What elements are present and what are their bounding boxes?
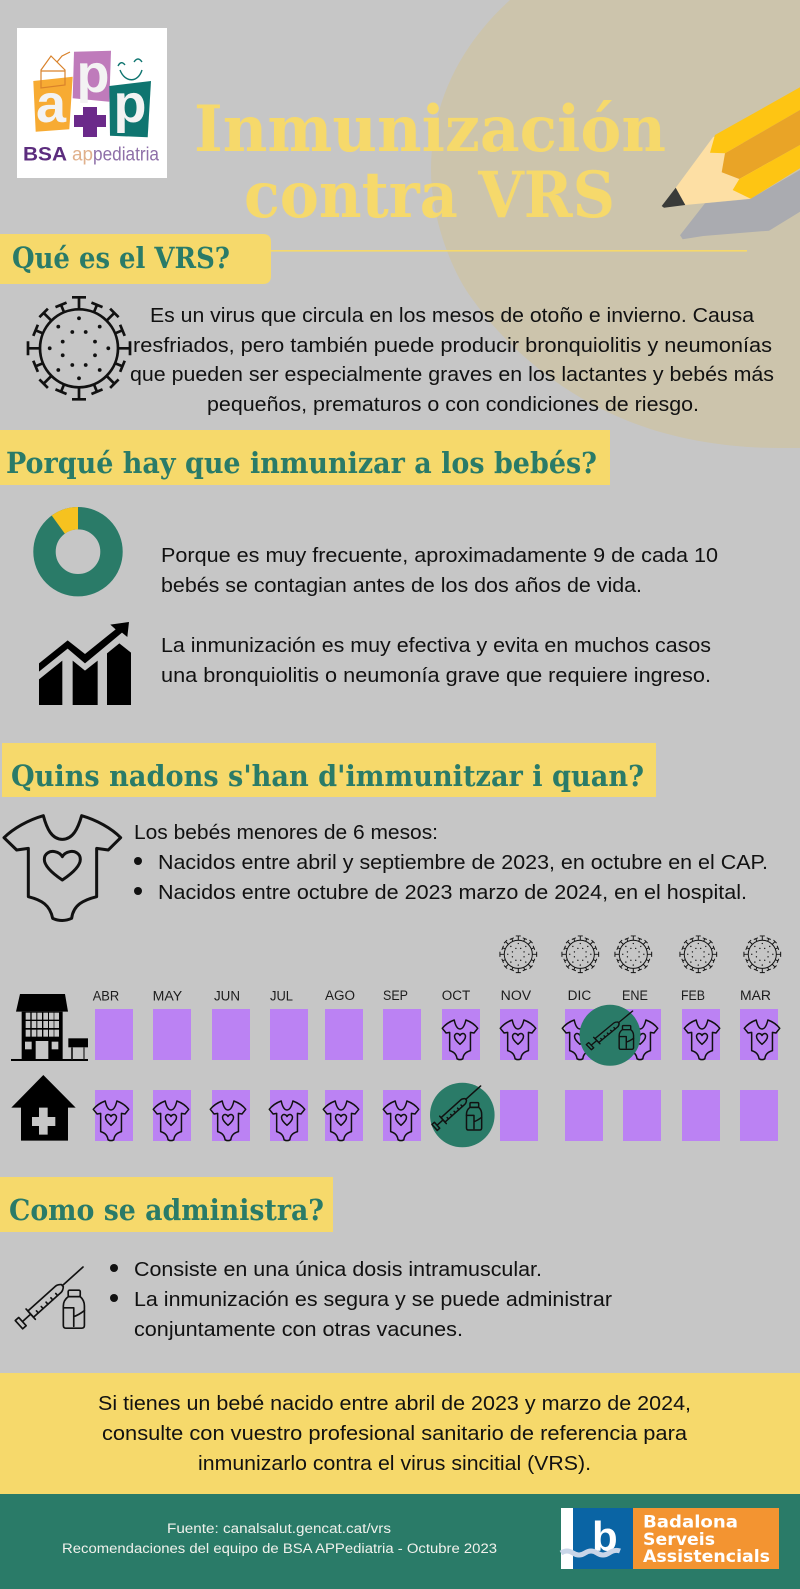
text: definition of VRS: resfriados, pero también puede producir bronquiolitis y neumonías xyxy=(133,335,772,357)
panel: call to action: consulte con vuestro profesional sanitario de referencia para xyxy=(102,1423,688,1445)
text: definition of VRS xyxy=(130,305,774,416)
icon: syringe and vial xyxy=(14,1262,88,1330)
heading: Porqué hay que inmunizar: Porqué hay que inmunizar a los bebés? xyxy=(6,446,597,480)
title xyxy=(194,92,666,233)
footer source text: Fuente: canalsalut.gencat.cat/vrs xyxy=(167,1521,391,1536)
logo: Badalona Serveis Assistencials: Badalona xyxy=(643,1513,738,1533)
text: who and when: Los bebés menores de 6 mesos: xyxy=(134,822,438,844)
text: administration bullets: conjuntamente con otras vacunes. xyxy=(134,1319,463,1341)
month labels xyxy=(93,988,771,1004)
icon: rising chart xyxy=(39,622,131,705)
text: definition of VRS: Es un virus que circula en los mesos de otoño e invierno. Causa xyxy=(150,305,755,327)
text: definition of VRS: pequeños, prematuros o con condiciones de riesgo. xyxy=(207,394,699,416)
text: who and when: Nacidos entre octubre de 2023 marzo de 2024, en el hospital. xyxy=(158,882,747,904)
logo: BSA appediatria: a xyxy=(36,74,67,134)
month labels: DIC xyxy=(568,988,591,1003)
row: primary care months xyxy=(95,1009,780,1060)
logo: BSA appediatria: pediatria xyxy=(93,144,159,166)
icon: hospital house xyxy=(11,1075,76,1141)
icon: virus xyxy=(28,297,130,399)
text: administration bullets: Consiste en una única dosis intramuscular. xyxy=(134,1259,542,1281)
text: definition of VRS: que pueden ser especialmente graves en los lactantes y bebés más xyxy=(130,364,774,386)
text: who and when: Nacidos entre abril y septiembre de 2023, en octubre en el CAP. xyxy=(158,852,768,874)
panel: footer xyxy=(0,1494,800,1589)
month labels: MAR xyxy=(740,988,771,1003)
callout: immunisation at primary care xyxy=(580,1005,640,1066)
text: effectiveness: una bronquiolitis o neumonía grave que requiere ingreso. xyxy=(161,665,711,687)
logo: Badalona Serveis Assistencials: Serveis xyxy=(643,1530,715,1550)
text: frequency: bebés se contagian antes de los dos años de vida. xyxy=(161,575,642,597)
heading: Como se administra xyxy=(0,1177,333,1232)
logo: BSA appediatria: BSA xyxy=(23,144,67,166)
text: administration bullets: La inmunización es segura y se puede administrar xyxy=(134,1289,612,1311)
month labels: SEP xyxy=(383,988,408,1003)
icon: baby onesie xyxy=(4,816,121,920)
month labels: FEB xyxy=(681,988,705,1003)
month labels: MAY xyxy=(153,989,182,1004)
logo: BSA appediatria xyxy=(17,28,167,178)
logo: BSA appediatria: p xyxy=(76,44,110,104)
heading: Qué es el VRS xyxy=(0,234,271,284)
title: Inmunización xyxy=(194,92,666,167)
heading: Quins nadons xyxy=(2,743,656,797)
heading: Quins nadons: Quins nadons s'han d'immunitzar i quan? xyxy=(11,759,644,793)
month labels: NOV xyxy=(501,988,531,1003)
text: who and when xyxy=(134,822,768,904)
text: effectiveness xyxy=(161,635,711,687)
icons: virus season markers xyxy=(500,936,781,973)
month labels: AGO xyxy=(325,988,355,1003)
heading: Qué es el VRS: Qué es el VRS? xyxy=(12,241,230,275)
callout: immunisation at hospital xyxy=(430,1082,495,1147)
text: frequency: Porque es muy frecuente, aproximadamente 9 de cada 10 xyxy=(161,545,718,567)
logo: Badalona Serveis Assistencials: b xyxy=(592,1513,618,1560)
icon: primary care centre building xyxy=(11,994,88,1061)
row: hospital months xyxy=(93,1090,778,1141)
footer source text xyxy=(62,1521,497,1556)
logo: Badalona Serveis Assistencials: Assistencials xyxy=(643,1547,770,1567)
text: administration bullets xyxy=(110,1259,612,1341)
text: frequency xyxy=(161,545,718,597)
month labels: OCT xyxy=(442,988,470,1003)
icon: pencil xyxy=(662,87,800,239)
text: effectiveness: La inmunización es muy efectiva y evita en muchos casos xyxy=(161,635,711,657)
decorative beige circle xyxy=(431,0,800,448)
logo: BSA appediatria: p xyxy=(114,74,146,134)
month labels: ABR xyxy=(93,989,119,1004)
heading: Como se administra: Como se administra? xyxy=(9,1193,324,1227)
logo: BSA appediatria: ap xyxy=(72,144,93,166)
panel: call to action xyxy=(0,1373,800,1494)
footer source text: Recomendaciones del equipo de BSA APPediatria - Octubre 2023 xyxy=(62,1541,497,1556)
heading: Porqué hay que inmunizar xyxy=(0,430,610,485)
panel: call to action: Si tienes un bebé nacido entre abril de 2023 y marzo de 2024, xyxy=(98,1393,691,1415)
logo: Badalona Serveis Assistencials xyxy=(561,1508,779,1569)
month labels: ENE xyxy=(622,988,648,1003)
month labels: JUL xyxy=(270,989,293,1004)
chart: donut 9 of 10 xyxy=(44,507,112,585)
panel: call to action: inmunizarlo contra el virus sincitial (VRS). xyxy=(198,1453,591,1475)
month labels: JUN xyxy=(214,989,240,1004)
title: contra VRS xyxy=(244,158,615,233)
